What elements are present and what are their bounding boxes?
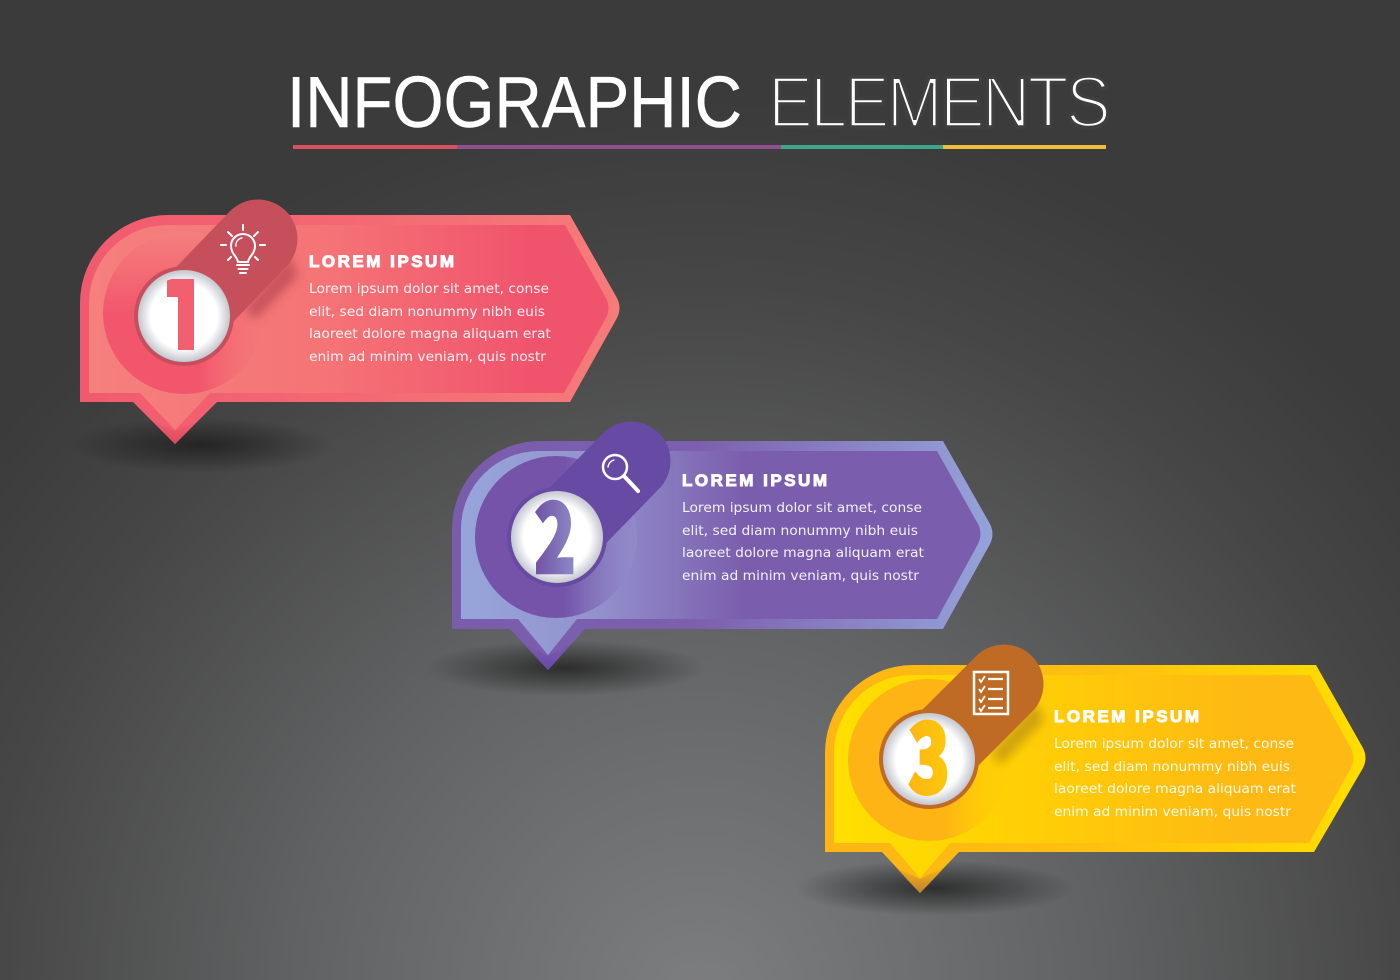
title underline bbox=[293, 145, 1106, 149]
ring bbox=[475, 456, 637, 618]
pointer tip bbox=[893, 866, 947, 893]
banner outer bbox=[452, 441, 992, 670]
pill tab bbox=[184, 239, 258, 316]
pill tab bbox=[929, 684, 1004, 759]
title bbox=[287, 63, 1108, 143]
body text: elit, sed diam nonummy nibh euis bbox=[309, 305, 545, 320]
body text: laoreet dolore magna aliquam erat bbox=[682, 546, 924, 561]
pointer shadow bbox=[795, 860, 1075, 916]
ring bbox=[848, 679, 1010, 841]
panel: step 1 bbox=[68, 215, 620, 473]
number 1: 1 bbox=[153, 237, 213, 378]
banner inner bbox=[834, 675, 1354, 878]
title word: infographic: INFOGRAPHIC bbox=[287, 63, 742, 143]
body text: enim ad minim veniam, quis nostr bbox=[309, 350, 547, 365]
ring highlight bbox=[102, 231, 266, 395]
ring bbox=[103, 232, 265, 394]
banner inner bbox=[461, 451, 980, 655]
pill shadow bbox=[245, 256, 298, 320]
body text: Lorem ipsum dolor sit amet, conse bbox=[682, 501, 922, 516]
pointer tip bbox=[150, 419, 200, 444]
number badge bbox=[879, 680, 979, 821]
heading: LOREM IPSUM bbox=[309, 252, 454, 271]
banner inner bbox=[89, 225, 608, 430]
body text: laoreet dolore magna aliquam erat bbox=[1054, 782, 1296, 797]
pointer shadow bbox=[68, 417, 332, 473]
number badge bbox=[507, 460, 607, 601]
icon: magnifier bbox=[603, 455, 638, 491]
heading: LOREM IPSUM bbox=[682, 471, 827, 490]
body text: enim ad minim veniam, quis nostr bbox=[682, 569, 920, 584]
body text bbox=[309, 282, 551, 365]
body text: laoreet dolore magna aliquam erat bbox=[309, 327, 551, 342]
heading: LOREM IPSUM bbox=[1054, 707, 1199, 726]
panel: step 2 bbox=[425, 441, 992, 696]
body text: Lorem ipsum dolor sit amet, conse bbox=[309, 282, 549, 297]
number 3: 3 bbox=[908, 680, 950, 821]
body text: enim ad minim veniam, quis nostr bbox=[1054, 805, 1292, 820]
icon: checklist bbox=[974, 672, 1008, 714]
panel: step 3 bbox=[795, 665, 1366, 916]
body text bbox=[682, 501, 924, 584]
body text bbox=[1054, 737, 1296, 820]
pill shadow bbox=[991, 701, 1044, 765]
number 2: 2 bbox=[534, 460, 576, 601]
body text: elit, sed diam nonummy nibh euis bbox=[682, 524, 918, 539]
number badge bbox=[134, 266, 234, 366]
title word: elements: ELEMENTS bbox=[768, 63, 1108, 143]
body text: elit, sed diam nonummy nibh euis bbox=[1054, 760, 1290, 775]
body text: Lorem ipsum dolor sit amet, conse bbox=[1054, 737, 1294, 752]
pointer tip bbox=[522, 642, 574, 670]
pointer shadow bbox=[425, 640, 705, 696]
banner outer bbox=[825, 665, 1366, 893]
icon: light bulb bbox=[221, 225, 265, 273]
pill tab bbox=[557, 461, 631, 537]
banner outer bbox=[80, 215, 620, 444]
